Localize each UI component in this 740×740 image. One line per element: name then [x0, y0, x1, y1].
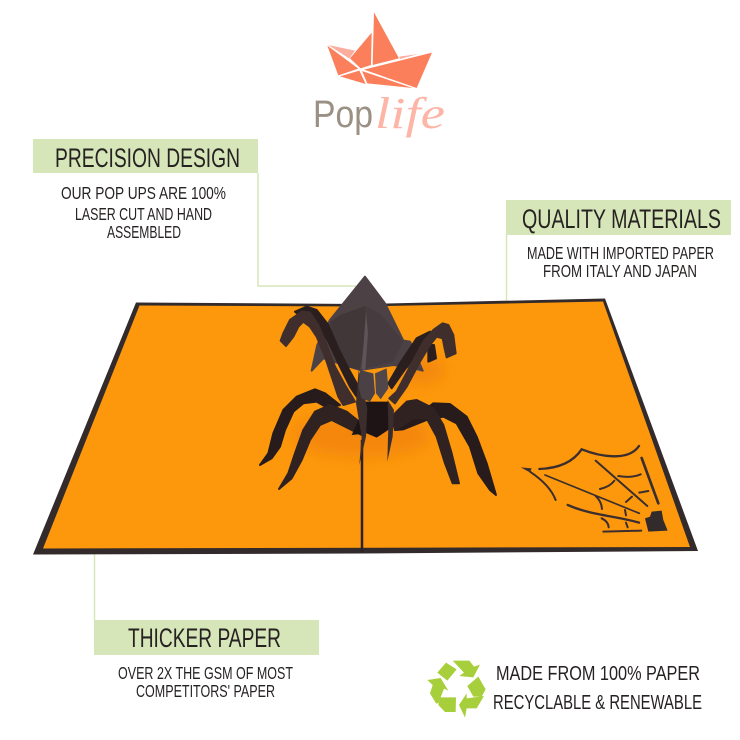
panel: recyclable message [427, 661, 702, 718]
card orange face [43, 302, 690, 548]
text block: OUR POP UPS ARE 100% [61, 183, 226, 203]
text block [61, 183, 226, 242]
text block: LASER CUT AND HAND [75, 204, 212, 224]
panel: precision design [33, 139, 258, 242]
heading: PRECISION DESIGN [55, 143, 240, 173]
centre fold [361, 440, 363, 552]
heading band [94, 620, 319, 655]
illustration: spider web [521, 446, 668, 532]
text block [493, 663, 702, 714]
icon: recycle arrows [427, 661, 486, 718]
panel: quality materials [506, 200, 731, 281]
logo word: life: life [375, 89, 445, 138]
text block: COMPETITORS' PAPER [136, 681, 275, 701]
text block: ASSEMBLED [107, 222, 181, 242]
text block: FROM ITALY AND JAPAN [543, 261, 697, 281]
back legs [295, 307, 436, 397]
spider abdomen [312, 277, 423, 371]
spider shadow [292, 356, 445, 457]
text block [118, 663, 293, 701]
illustration: spider [260, 277, 496, 495]
logo: Poplife paper boat [313, 12, 445, 138]
connector lines [94, 173, 506, 620]
card border [33, 298, 698, 554]
panel: thicker paper [94, 620, 319, 701]
heading: THICKER PAPER [128, 623, 281, 653]
near legs [279, 400, 459, 489]
text block [527, 243, 714, 281]
logo word: Pop: Pop [313, 94, 373, 136]
text block: OVER 2X THE GSM OF MOST [118, 663, 293, 683]
text block: MADE FROM 100% PAPER [496, 663, 700, 685]
heading band [33, 139, 258, 173]
heading band [506, 200, 731, 235]
front upper legs [281, 312, 456, 405]
far legs [260, 389, 496, 495]
spider head and fangs [352, 368, 394, 465]
icon: origami boat [327, 12, 432, 88]
pop up card [33, 277, 698, 554]
